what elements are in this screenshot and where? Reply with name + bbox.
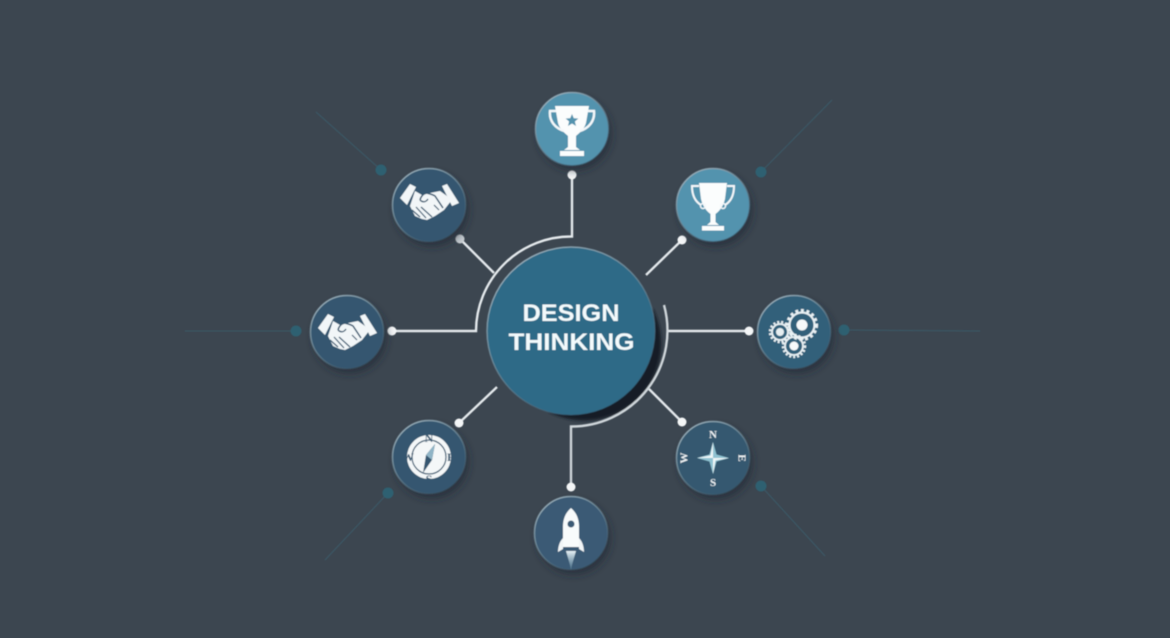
connector lines and arcs xyxy=(388,170,754,492)
icon: compass: S xyxy=(426,472,433,486)
title: DESIGN xyxy=(522,300,620,327)
icon: compass: N xyxy=(425,431,434,445)
icon: compass star xyxy=(676,422,750,494)
title: THINKING xyxy=(508,329,634,356)
icon: compass xyxy=(392,420,466,494)
icon: compass star: N xyxy=(709,429,717,441)
icon: compass star: E xyxy=(736,454,748,462)
faint outer connector: right xyxy=(838,324,980,336)
faint outer connector: lower left xyxy=(325,488,394,560)
artwork xyxy=(185,92,980,570)
title xyxy=(508,300,634,356)
icon: trophy with star xyxy=(536,92,608,166)
icon: handshake left xyxy=(310,296,384,368)
icon: compass star: W xyxy=(678,452,690,464)
icon: gears xyxy=(758,296,830,368)
faint outer connector: upper right xyxy=(756,100,832,178)
icon: trophy xyxy=(676,168,750,242)
icon: handshake upper xyxy=(392,168,466,242)
faint outer connector: lower right xyxy=(756,480,825,556)
icon: compass: E xyxy=(447,450,455,464)
faint outer connector: upper left xyxy=(316,112,386,176)
icon: compass star: S xyxy=(710,477,716,489)
icon: rocket xyxy=(534,496,608,570)
centre hub: Design Thinking xyxy=(487,247,655,415)
icon: compass: W xyxy=(402,450,414,464)
hub shadow crescent xyxy=(549,309,661,420)
faint outer connector: left xyxy=(185,326,302,336)
